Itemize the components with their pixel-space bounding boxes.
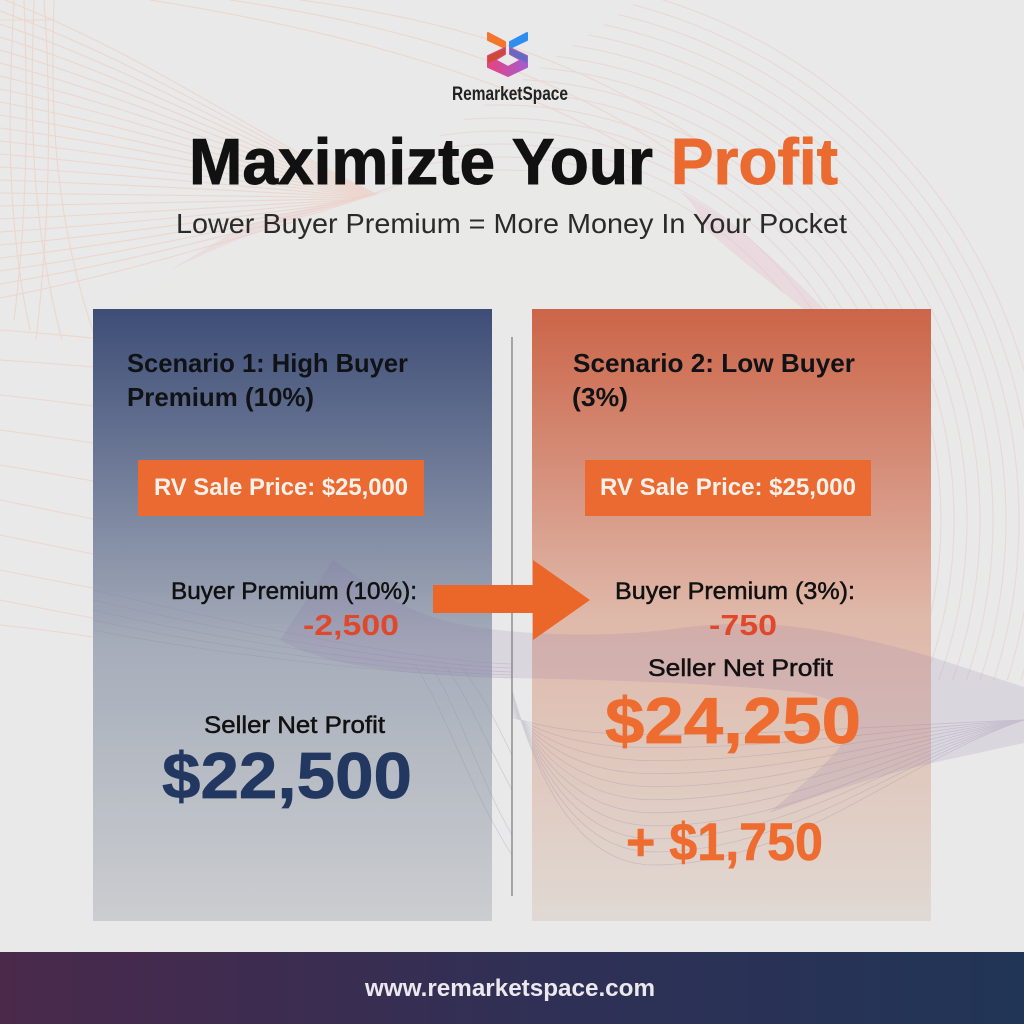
sale price box [138, 460, 424, 516]
panel: scenario 2 background [532, 309, 931, 921]
sale price box [585, 460, 871, 516]
divider line [511, 337, 513, 896]
seller net profit value: $22,500 [162, 739, 412, 812]
scenario 2 heading: Scenario 2: Low Buyer [573, 348, 855, 378]
background line pattern: top left fan [0, 0, 730, 637]
scenario 1 heading: Premium (10%) [127, 382, 314, 412]
sale price box: RV Sale Price: $25,000 [600, 474, 856, 501]
background line pattern: purple ribbon and curves [93, 560, 1024, 865]
scenario 2 heading: (3%) [572, 382, 628, 412]
website url: www.remarketspace.com [364, 975, 655, 1002]
panel: scenario 2 content [572, 348, 871, 872]
background swoosh: pale wave with pink ridge [95, 171, 835, 320]
arrow [433, 560, 590, 640]
buyer premium label: Buyer Premium (10%): [171, 578, 417, 605]
sale price box: RV Sale Price: $25,000 [154, 474, 408, 501]
buyer premium value: -750 [709, 610, 777, 642]
panel: scenario 1 background [93, 309, 492, 921]
logo [452, 33, 568, 105]
scenario 1 heading: Scenario 1: High Buyer [127, 348, 408, 378]
subtitle: Lower Buyer Premium = More Money In Your Pocket [176, 208, 847, 239]
seller net profit label: Seller Net Profit [648, 655, 833, 682]
footer bar [0, 952, 1024, 1024]
seller net profit value: $24,250 [605, 684, 861, 757]
profit difference: + $1,750 [626, 813, 823, 872]
buyer premium label: Buyer Premium (3%): [615, 578, 855, 605]
seller net profit label: Seller Net Profit [204, 712, 385, 739]
title: Maximizte Your Profit [189, 125, 838, 198]
icon: logo mark [488, 33, 527, 76]
panel: scenario 1 content [127, 348, 424, 812]
background line pattern: right arcs [360, 0, 1024, 680]
buyer premium value: -2,500 [303, 610, 399, 642]
logo wordmark: RemarketSpace [452, 83, 568, 105]
